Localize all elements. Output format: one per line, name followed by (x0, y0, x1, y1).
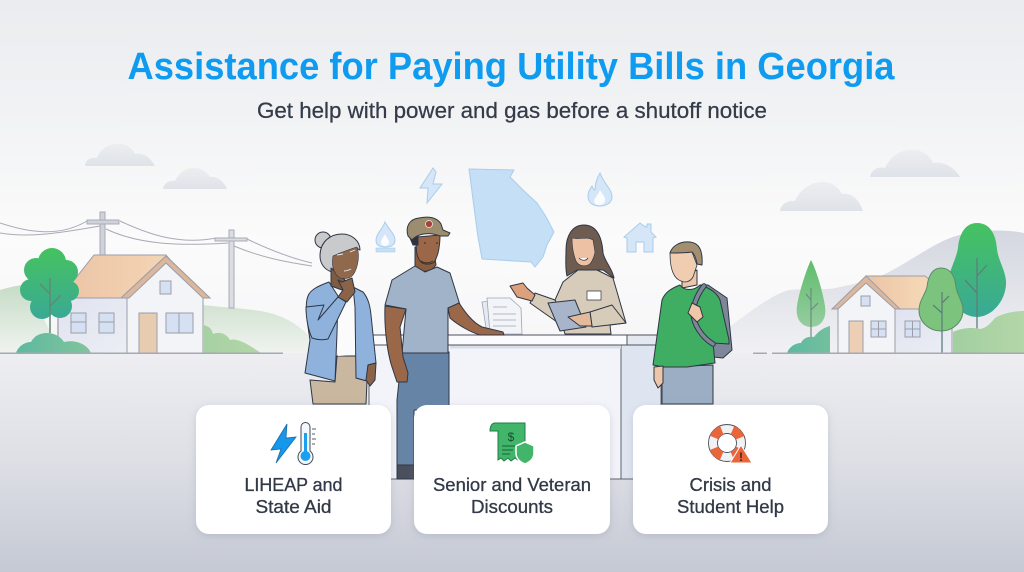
counter top (373, 335, 627, 345)
hand to chin (338, 278, 355, 302)
neck (415, 247, 436, 271)
icon: life ring with warning: ! (739, 450, 743, 464)
card: Crisis and Student Help: Student Help (677, 497, 784, 517)
service counter (369, 335, 661, 479)
right bushes (787, 311, 1024, 353)
forearm sleeve (590, 305, 626, 327)
hand on tablet (568, 312, 592, 326)
raised sleeve (306, 297, 346, 340)
clouds (85, 144, 960, 211)
jeans (662, 365, 713, 404)
left tree (20, 248, 79, 338)
icon: house (624, 223, 656, 252)
right scene: hills, trees and house (715, 223, 1024, 353)
neck (682, 270, 697, 288)
right house (832, 276, 952, 353)
icon: receipt with shield: $ (508, 430, 515, 444)
icon: lightning and thermometer (271, 423, 316, 465)
lower hand (366, 363, 376, 386)
slim tree (797, 260, 825, 340)
icon: receipt with shield (490, 423, 534, 464)
face (572, 238, 595, 266)
left scene: hills, power lines and house (0, 212, 312, 353)
utility poles and wires (0, 212, 312, 308)
right arm (448, 303, 504, 335)
long hair (566, 225, 614, 278)
person: service worker (510, 225, 626, 334)
icon: flame (588, 173, 612, 206)
card: Crisis and Student Help (633, 405, 828, 534)
neck (331, 268, 345, 290)
card: Senior and Veteran Discounts (414, 405, 610, 534)
ground (0, 353, 1024, 572)
backpack strap fill (693, 286, 713, 344)
trousers (310, 356, 367, 404)
face (416, 235, 440, 264)
card: LIHEAP and State Aid: State Aid (256, 497, 332, 517)
open hand (510, 283, 535, 301)
face (332, 247, 358, 279)
smile (579, 258, 588, 260)
tall background tree (948, 223, 1006, 353)
card text: LIHEAP and (244, 475, 342, 495)
front round tree (919, 268, 963, 353)
hair (410, 236, 418, 245)
counter side (621, 345, 661, 479)
person: older woman (305, 232, 376, 404)
card text: Senior and Veteran (433, 475, 591, 495)
card: LIHEAP and State Aid (196, 405, 391, 534)
shirt (555, 270, 626, 334)
outstretched sleeve (530, 293, 565, 322)
backpack (692, 285, 732, 358)
hair bun (315, 232, 331, 248)
backpack strap (693, 286, 713, 344)
left bushes (16, 325, 261, 353)
white shirt (330, 287, 355, 356)
hand on strap (688, 303, 703, 322)
subtitle: Get help with power and gas before a shutoff notice (257, 98, 767, 123)
cap (407, 217, 450, 240)
counter front (369, 345, 621, 479)
background sky (0, 0, 1024, 353)
lower hand (654, 366, 663, 388)
ground line right (753, 352, 1024, 354)
card text: Crisis and (690, 475, 772, 495)
t-shirt (385, 266, 460, 353)
counter top side section (627, 335, 659, 345)
shoe (397, 465, 414, 479)
cardigan (305, 282, 376, 381)
Georgia state map (469, 169, 554, 267)
icon: life ring with warning (708, 424, 752, 464)
hair (670, 242, 702, 265)
ground line left (0, 352, 283, 354)
tablet (548, 300, 586, 331)
name badge (587, 291, 601, 300)
person: student with backpack (653, 242, 732, 404)
mouth and eyes (421, 242, 437, 263)
card: Senior and Veteran Discounts: Discounts (471, 497, 553, 517)
head (670, 252, 697, 282)
person: man in cap (385, 217, 504, 479)
documents on counter (482, 298, 522, 334)
left house (58, 255, 210, 353)
right hills (715, 230, 1024, 353)
sweater (653, 285, 729, 367)
title: Assistance for Paying Utility Bills in Georgia (128, 46, 895, 88)
left arm (385, 306, 408, 382)
brows and mouth (337, 250, 355, 271)
hair (320, 234, 360, 272)
cap badge (426, 220, 432, 228)
left hills (0, 285, 312, 353)
icon: gas burner (376, 222, 395, 252)
jeans (397, 352, 449, 465)
icon: lightning bolt (420, 168, 442, 203)
